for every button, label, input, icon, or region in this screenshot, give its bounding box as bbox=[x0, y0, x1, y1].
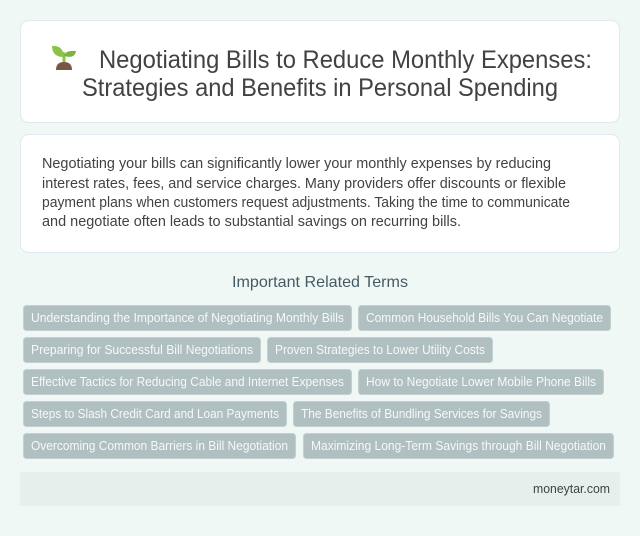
footer bbox=[20, 472, 620, 506]
chip: Proven Strategies to Lower Utility Costs bbox=[275, 342, 485, 357]
chip: How to Negotiate Lower Mobile Phone Bills bbox=[366, 374, 596, 389]
chip: Preparing for Successful Bill Negotiations bbox=[31, 342, 253, 357]
title bbox=[82, 46, 592, 102]
chip: Understanding the Importance of Negotiating Monthly Bills bbox=[31, 310, 344, 325]
panel: title card bbox=[20, 20, 620, 122]
text block: summary bbox=[42, 156, 570, 230]
chip bbox=[24, 402, 286, 426]
footer text: site name: moneytar.com bbox=[533, 481, 610, 496]
chip bbox=[304, 434, 614, 458]
title: Strategies and Benefits in Personal Spending bbox=[82, 74, 558, 102]
icon: seedling bbox=[52, 46, 76, 70]
title: Negotiating Bills to Reduce Monthly Expenses: bbox=[99, 46, 592, 74]
chip: The Benefits of Bundling Services for Savings bbox=[301, 406, 542, 421]
chip: Steps to Slash Credit Card and Loan Payments bbox=[31, 406, 279, 421]
chip bbox=[358, 370, 604, 394]
text block: summary: and negotiate often leads to substantial savings on recurring bills. bbox=[42, 214, 461, 230]
chip bbox=[24, 338, 260, 362]
chip bbox=[24, 434, 296, 458]
text block: summary: payment plans when customers request adjustments. Taking the time to communicate bbox=[42, 195, 570, 211]
chip group: related terms bbox=[24, 306, 614, 458]
heading: related terms: Important Related Terms bbox=[232, 274, 408, 291]
chip bbox=[294, 402, 550, 426]
chip bbox=[24, 306, 352, 330]
chip: Common Household Bills You Can Negotiate bbox=[366, 310, 603, 325]
text block: summary: Negotiating your bills can significantly lower your monthly expenses by reducing bbox=[42, 156, 551, 172]
chip: Effective Tactics for Reducing Cable and Internet Expenses bbox=[31, 374, 344, 389]
text block: summary: interest rates, fees, and service charges. Many providers offer discounts or flexible bbox=[42, 176, 566, 192]
chip bbox=[358, 306, 610, 330]
chip: Overcoming Common Barriers in Bill Negotiation bbox=[31, 438, 288, 453]
panel: summary bbox=[20, 134, 620, 252]
chip bbox=[268, 338, 492, 362]
chip: Maximizing Long-Term Savings through Bill Negotiation bbox=[311, 438, 606, 453]
chip bbox=[24, 370, 352, 394]
